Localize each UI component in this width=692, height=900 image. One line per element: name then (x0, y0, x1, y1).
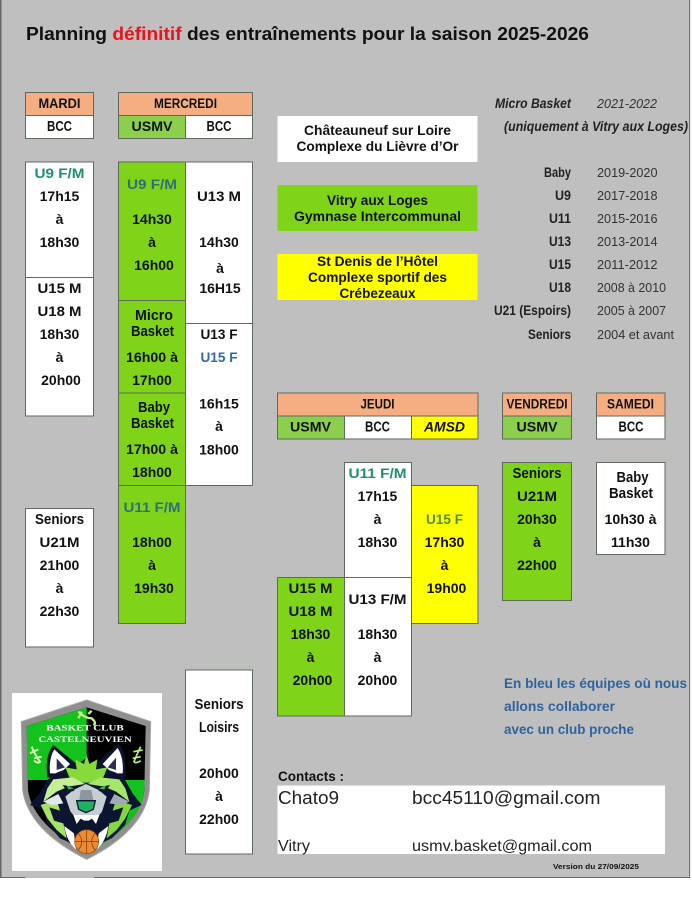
logo text: BASKET CLUB (46, 724, 124, 733)
jeudi BCC session: U13 F/M (344, 578, 412, 716)
mardi session: Seniors U21M: 21h00 (40, 557, 80, 573)
jeudi BCC session: U13 F/M: 20h00 (358, 672, 398, 688)
panel: vendredi header: USMV (516, 418, 558, 434)
panel: jeudi header (278, 393, 478, 439)
jeudi BCC session: U13 F/M: U13 F/M (348, 591, 406, 607)
location: St Denis de l'Hôtel: Complexe sportif des (308, 269, 447, 285)
jeudi AMSD session: U15 F: U15 F (426, 511, 463, 527)
mercredi BCC session: U13 F / U15 F: U13 F (200, 326, 238, 342)
jeudi BCC session: U13 F/M: à (374, 649, 382, 665)
jeudi USMV session: U15 M / U18 M: U18 M (288, 603, 332, 619)
age categories table: 2008 à 2010 (597, 280, 666, 295)
note: blue teams (504, 676, 687, 737)
mercredi BCC session: Seniors Loisirs: 20h00 (199, 765, 239, 781)
mercredi BCC session: U13 M: 16H15 (199, 280, 241, 296)
jeudi USMV session: U15 M / U18 M: 18h30 (291, 626, 331, 642)
age categories table: 2005 à 2007 (597, 303, 666, 318)
jeudi USMV session: U15 M / U18 M: à (307, 649, 315, 665)
mercredi BCC session: U13 M (186, 162, 252, 324)
panel: samedi header (596, 393, 665, 439)
age categories table: 2021-2022 (596, 96, 658, 111)
vendredi USMV session: Seniors U21M: Seniors (512, 466, 562, 482)
mercredi USMV session: U11 F/M: 19h30 (134, 580, 174, 596)
samedi BCC session: Baby Basket: Basket (609, 486, 653, 502)
basketball (75, 830, 99, 854)
mercredi USMV session: Baby Basket: Basket (131, 416, 174, 432)
jeudi BCC session: U13 F/M: 18h30 (358, 626, 398, 642)
vendredi USMV session: Seniors U21M: à (533, 534, 541, 550)
panel: jeudi header: AMSD (423, 418, 465, 434)
mardi session: U9 F/M: 18h30 (40, 234, 80, 250)
panel: jeudi header: JEUDI (360, 396, 394, 412)
age categories table: 2015-2016 (597, 211, 658, 226)
mercredi USMV session: Micro Basket: Basket (131, 324, 174, 340)
mercredi USMV session: U9 F/M: à (148, 234, 156, 250)
mercredi USMV session: Micro Basket: Micro (135, 308, 173, 324)
note: blue teams: En bleu les équipes où nous (504, 676, 687, 691)
vendredi USMV session: Seniors U21M: 22h00 (517, 557, 557, 573)
mercredi USMV session: Baby Basket: 17h00 à (126, 441, 178, 457)
jeudi AMSD session: U15 F: 17h30 (425, 534, 465, 550)
location: Châteauneuf sur Loire (278, 116, 478, 162)
jeudi BCC session: U11 F/M: à (374, 511, 382, 527)
location: Vitry aux Loges: Vitry aux Loges (327, 192, 428, 208)
ears (47, 745, 76, 779)
jeudi USMV session: U15 M / U18 M: U15 M (288, 580, 332, 596)
location: St Denis de l'Hôtel: St Denis de l’Hôtel (317, 253, 438, 269)
mercredi BCC session: Seniors Loisirs: Seniors (194, 697, 244, 713)
panel: contacts: usmv.basket@gmail.com (412, 838, 592, 855)
mardi session: U9 F/M: à (56, 211, 64, 227)
mardi session: U15 M / U18 M: U18 M (38, 303, 82, 319)
mardi session: Seniors U21M (26, 508, 94, 647)
mardi session: U15 M / U18 M: 18h30 (40, 326, 80, 342)
jeudi BCC session: U11 F/M (344, 462, 412, 578)
mercredi BCC session: U13 F / U15 F: U15 F (200, 349, 238, 365)
vendredi USMV session: Seniors U21M: U21M (517, 488, 557, 504)
contacts heading: Contacts : (278, 768, 344, 784)
mardi session: U15 M / U18 M: 20h00 (41, 372, 81, 388)
samedi BCC session: Baby Basket (596, 462, 665, 554)
age categories table: 2019-2020 (597, 165, 658, 180)
mercredi BCC session: U13 M: 14h30 (199, 234, 239, 250)
age categories table: Micro Basket (495, 96, 571, 111)
jeudi BCC session: U11 F/M: 18h30 (358, 534, 398, 550)
mercredi USMV session: U9 F/M: U9 F/M (127, 176, 177, 192)
face (65, 784, 107, 816)
jeudi BCC session: U11 F/M: U11 F/M (348, 465, 406, 481)
mercredi USMV session: Micro Basket (118, 300, 186, 393)
mercredi BCC session: Seniors Loisirs (186, 670, 252, 854)
mardi session: U9 F/M: U9 F/M (34, 165, 84, 181)
vendredi USMV session: Seniors U21M (502, 462, 572, 600)
age categories table: U13 (549, 234, 571, 249)
panel: vendredi header (502, 393, 572, 439)
panel: vendredi header: VENDREDI (506, 396, 568, 412)
mercredi BCC session: Seniors Loisirs: 22h00 (199, 811, 239, 827)
mardi session: Seniors U21M: 22h30 (40, 603, 80, 619)
mardi session: Seniors U21M: à (56, 580, 64, 596)
note: blue teams: allons collaborer (504, 699, 616, 714)
mercredi USMV session: Micro Basket: 17h00 (132, 372, 172, 388)
mercredi BCC session: U13 F / U15 F: à (215, 418, 223, 434)
location: St Denis de l'Hôtel: Crébezeaux (340, 285, 416, 301)
mardi session: U15 M / U18 M: à (56, 349, 64, 365)
panel: contacts (278, 786, 665, 855)
panel: mardi header: BCC (47, 119, 72, 135)
mercredi USMV session: Micro Basket: 16h00 à (126, 349, 178, 365)
age categories table: U21 (Espoirs) (494, 303, 571, 318)
mercredi USMV session: U9 F/M: 16h00 (134, 257, 174, 273)
mardi session: U9 F/M (26, 162, 94, 278)
mane (30, 758, 142, 844)
logo: Basket Club Castelneuvien (12, 693, 162, 871)
location: Vitry aux Loges: Gymnase Intercommunal (294, 208, 461, 224)
mardi session: U9 F/M: 17h15 (40, 188, 80, 204)
age categories table: U15 (549, 257, 571, 272)
mercredi USMV session: Baby Basket (118, 393, 186, 486)
panel: jeudi header: USMV (290, 418, 332, 434)
mercredi USMV session: U9 F/M: 14h30 (132, 211, 172, 227)
jeudi AMSD session: U15 F (412, 486, 478, 624)
mardi session: Seniors U21M: Seniors (35, 512, 84, 528)
panel: mercredi header (118, 92, 252, 138)
geckos (78, 711, 95, 725)
jeudi USMV session: U15 M / U18 M (278, 578, 344, 716)
mouth (65, 805, 107, 835)
panel: mercredi header: MERCREDI (154, 96, 217, 111)
vendredi USMV session: Seniors U21M: 20h30 (517, 511, 557, 527)
location: St Denis de l'Hôtel (278, 253, 478, 301)
mercredi BCC session: U13 F / U15 F (186, 324, 252, 486)
samedi BCC session: Baby Basket: 10h30 à (604, 511, 657, 527)
jeudi AMSD session: U15 F: à (441, 557, 449, 573)
age categories table: 2004 et avant (597, 327, 674, 342)
logo: Basket Club Castelneuvien: CASTELNEUVIEN (38, 735, 132, 744)
age categories table: Baby (544, 165, 571, 180)
samedi BCC session: Baby Basket: 11h30 (611, 534, 650, 550)
panel: samedi header: BCC (618, 420, 644, 436)
panel: mercredi header: BCC (206, 119, 232, 135)
mercredi BCC session: U13 F / U15 F: 18h00 (199, 442, 239, 458)
age categories table: 2017-2018 (597, 188, 658, 203)
age categories table: U11 (549, 211, 571, 226)
age categories table (494, 96, 688, 342)
panel: samedi header: SAMEDI (607, 396, 654, 412)
title: Planning définitif des entraînements pour la saison 2025-2026 (26, 23, 589, 44)
jeudi AMSD session: U15 F: 19h00 (427, 580, 467, 596)
mercredi USMV session: U11 F/M: à (148, 557, 156, 573)
mercredi BCC session: U13 M: U13 M (197, 188, 241, 204)
version note: Version du 27/09/2025 (553, 862, 639, 871)
jeudi BCC session: U11 F/M: 17h15 (358, 488, 398, 504)
mardi session: U15 M / U18 M (26, 278, 94, 416)
mercredi BCC session: Seniors Loisirs: Loisirs (199, 720, 239, 736)
location: Vitry aux Loges (278, 185, 478, 231)
age categories table: 2011-2012 (597, 257, 658, 272)
mardi session: U15 M / U18 M: U15 M (38, 280, 82, 296)
mercredi USMV session: Baby Basket: 18h00 (132, 464, 172, 480)
mercredi USMV session: U9 F/M (118, 162, 186, 300)
panel: contacts: Chato9 (278, 787, 339, 808)
jeudi USMV session: U15 M / U18 M: 20h00 (293, 672, 333, 688)
location: Châteauneuf sur Loire: Complexe du Lièvre d’Or (296, 138, 459, 154)
samedi BCC session: Baby Basket: Baby (616, 470, 648, 486)
panel: mardi header: MARDI (38, 96, 80, 111)
panel: contacts: bcc45110@gmail.com (412, 787, 600, 808)
mercredi BCC session: U13 M: à (216, 260, 224, 276)
location: Châteauneuf sur Loire: Châteauneuf sur Loire (304, 122, 451, 138)
age categories table: Seniors (528, 327, 571, 342)
age categories table: U9 (555, 188, 571, 203)
note: blue teams: avec un club proche (504, 722, 634, 737)
mercredi USMV session: Baby Basket: Baby (138, 400, 170, 416)
panel: mardi header (26, 92, 94, 138)
mercredi USMV session: U11 F/M (118, 486, 186, 624)
mardi session: Seniors U21M: U21M (40, 534, 80, 550)
mercredi USMV session: U11 F/M: U11 F/M (124, 499, 180, 515)
age categories table: 2013-2014 (597, 234, 658, 249)
mercredi BCC session: U13 F / U15 F: 16h15 (199, 396, 239, 412)
panel: jeudi header: BCC (365, 420, 390, 436)
panel: contacts: Vitry (278, 838, 310, 855)
mercredi BCC session: Seniors Loisirs: à (215, 788, 223, 804)
panel: mercredi header: USMV (132, 118, 173, 134)
mercredi USMV session: U11 F/M: 18h00 (132, 534, 172, 550)
age categories table: U18 (549, 280, 571, 295)
